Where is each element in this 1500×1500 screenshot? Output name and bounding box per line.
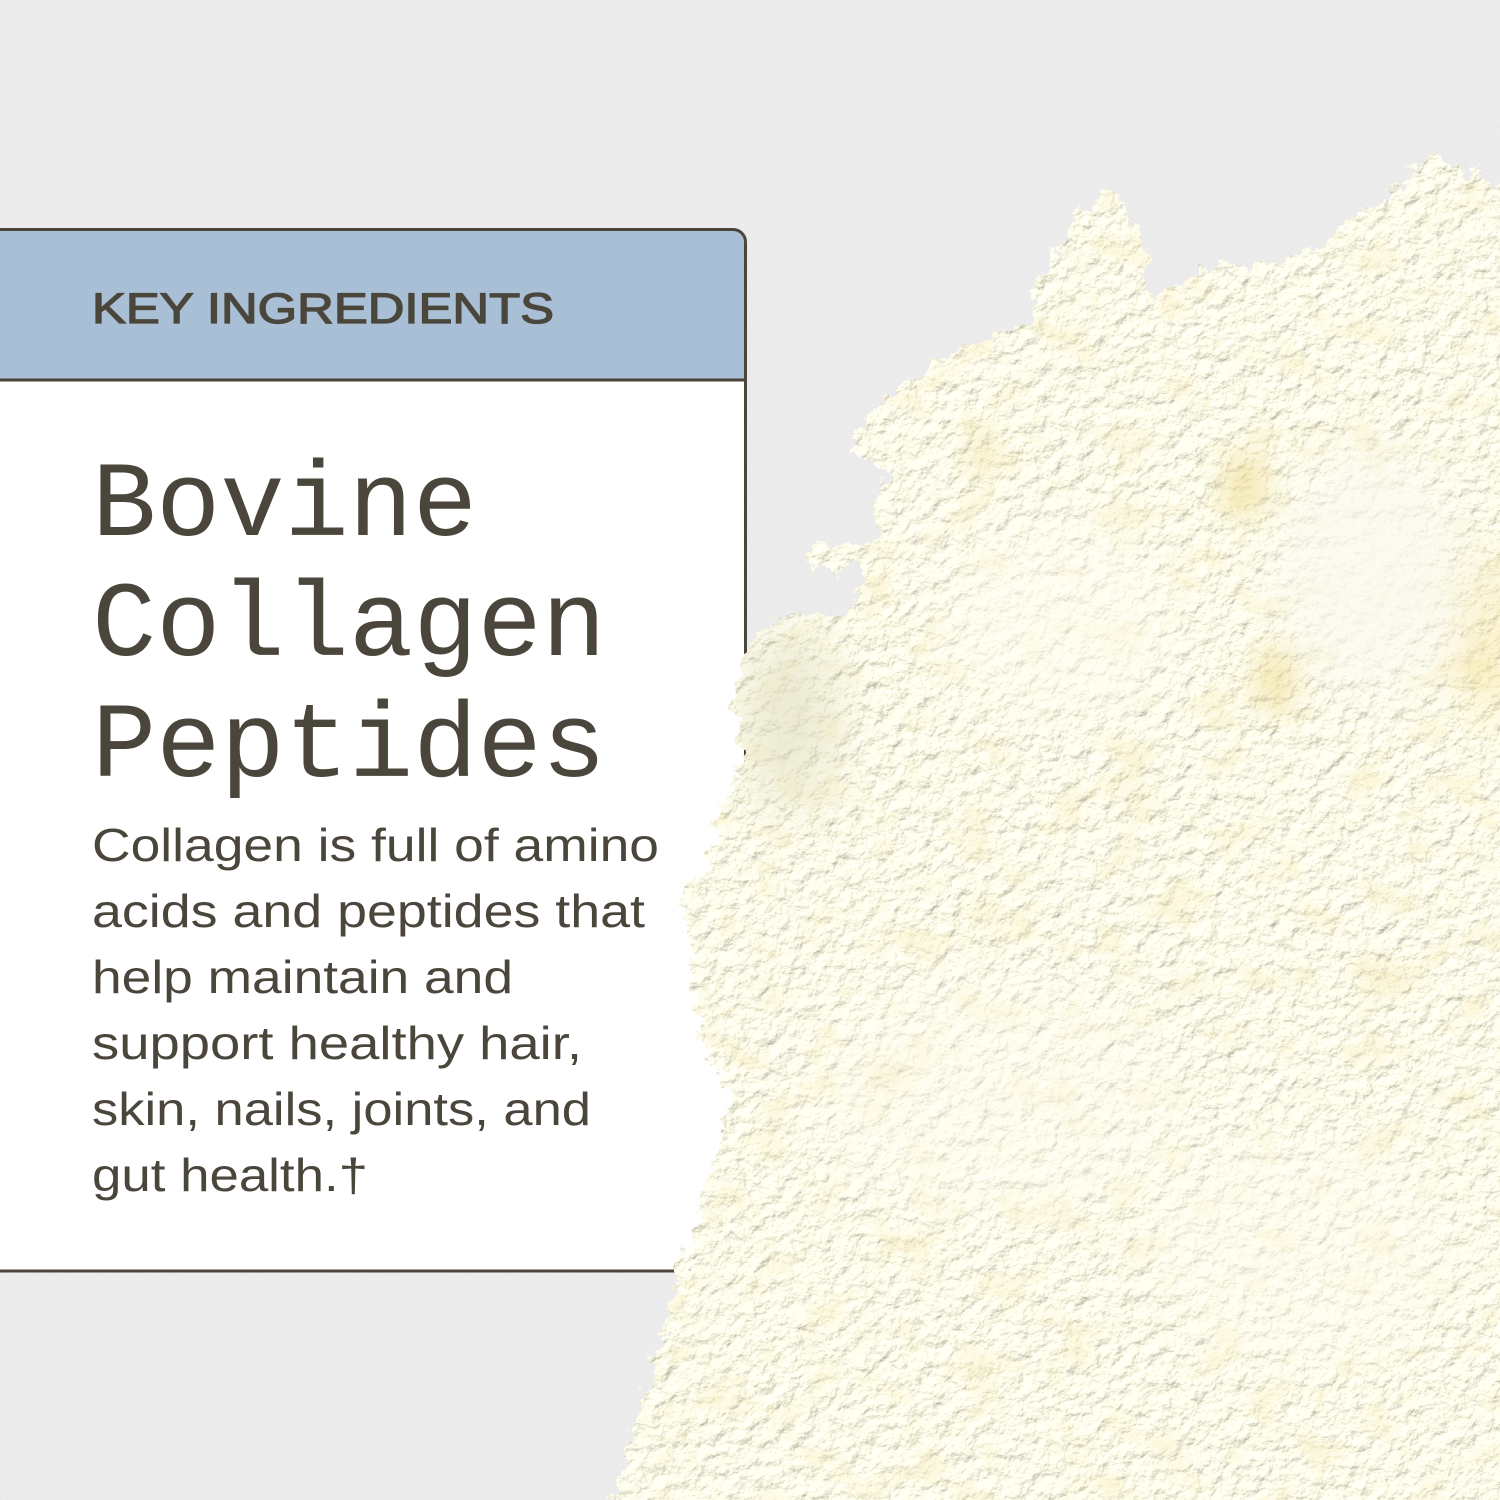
card header band bbox=[0, 230, 745, 380]
header label: KEY INGREDIENTS bbox=[92, 285, 554, 333]
heading: product name: Bovine bbox=[92, 447, 477, 568]
card body bbox=[0, 382, 744, 1270]
creases with warm yellow shadow bbox=[869, 437, 1398, 1084]
broad shading and highlights in the powder bbox=[745, 450, 1500, 1370]
heading: product name: Peptides bbox=[92, 688, 606, 809]
body description: gut health.† bbox=[92, 1149, 368, 1201]
body description bbox=[92, 819, 659, 1201]
panel: key ingredients card bbox=[0, 229, 746, 1271]
body description: support healthy hair, bbox=[92, 1017, 582, 1069]
heading: product name: Collagen bbox=[92, 567, 606, 688]
body description: skin, nails, joints, and bbox=[92, 1083, 591, 1135]
body description: Collagen is full of amino bbox=[92, 819, 659, 871]
body description: acids and peptides that bbox=[92, 885, 645, 937]
body description: help maintain and bbox=[92, 951, 513, 1003]
heading: product name bbox=[92, 447, 606, 809]
image: collagen powder pile bbox=[600, 140, 1500, 1500]
